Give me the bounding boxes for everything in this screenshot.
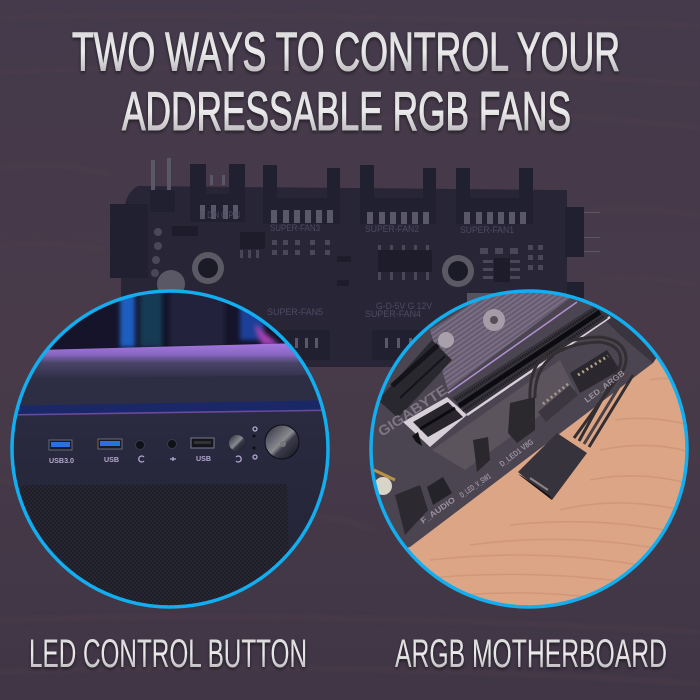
pin header (570, 350, 620, 393)
silkscreen labels: SUPER-FAN4 (365, 309, 421, 319)
board silkscreen text: LED_ARGB (583, 368, 627, 405)
wood surface (408, 358, 686, 606)
silkscreen labels (200, 210, 514, 319)
board silkscreen text: F_AUDIO (419, 495, 457, 526)
audio jacks (136, 440, 176, 450)
board body (121, 186, 567, 367)
LEDs (252, 434, 256, 450)
front panel (14, 411, 326, 550)
silkscreen labels: SUPER-FAN2 (365, 224, 419, 234)
solder pads (151, 228, 543, 280)
mounting holes (192, 252, 474, 287)
silkscreen labels: SUPER-FAN3 (270, 223, 320, 233)
caption: LED control button: LED CONTROL BUTTON (29, 632, 307, 676)
circle photo: ARGB motherboard header and cable (365, 285, 700, 615)
5-pin LED header (538, 384, 578, 422)
jumper (473, 437, 490, 472)
board silkscreen text: GIGABYTE (375, 381, 450, 439)
large PCIe slot (452, 307, 608, 413)
USB port (98, 439, 122, 449)
mesh filter (20, 484, 288, 606)
USB port 3.0 (49, 440, 72, 450)
circle border (371, 291, 687, 607)
connector housings (110, 164, 584, 360)
port labels: USB (196, 456, 211, 463)
silkscreen labels: SUPER-FAN1 (460, 225, 514, 235)
board silkscreen text: D_LED1 V8G (498, 437, 535, 469)
tiny port icons (139, 427, 257, 462)
top panel (20, 376, 318, 406)
upper left PCIe slot (378, 340, 452, 418)
capacitor (157, 270, 185, 298)
cable wires (530, 337, 633, 447)
chips (172, 226, 510, 286)
ARGB plug (518, 433, 587, 500)
purple glow band (30, 344, 308, 379)
pins (151, 158, 600, 348)
port labels: USB3.0 (49, 458, 74, 465)
power button (265, 425, 299, 459)
case interior (50, 292, 285, 350)
silkscreen labels: G-D-5V G 12V (376, 301, 432, 311)
silkscreen labels: SUPER-FAN5 (267, 307, 323, 317)
USB port black (191, 438, 214, 448)
port labels: USB (104, 457, 119, 464)
circle photo: LED control button on PC case (10, 289, 330, 609)
mounting screw (483, 309, 505, 331)
traced PCB area (430, 292, 578, 390)
board silkscreen text (375, 368, 627, 526)
4-pin plug on header (508, 397, 535, 443)
small white slot (403, 397, 467, 447)
translucent area beneath slot (432, 360, 575, 470)
grey pad block (467, 293, 502, 311)
title (72, 20, 620, 142)
small header (427, 477, 452, 505)
silkscreen labels: G DIN G PIN (200, 210, 240, 220)
left lower header (395, 485, 428, 535)
slot highlight lines (448, 302, 610, 415)
port labels (49, 456, 211, 463)
circle border (12, 291, 328, 607)
reset button (229, 435, 245, 451)
capacitor (374, 470, 395, 495)
fan hub circuit board (110, 158, 600, 367)
board silkscreen text: D_LED_V_SW1 (458, 471, 493, 500)
motherboard PCB (372, 298, 654, 548)
